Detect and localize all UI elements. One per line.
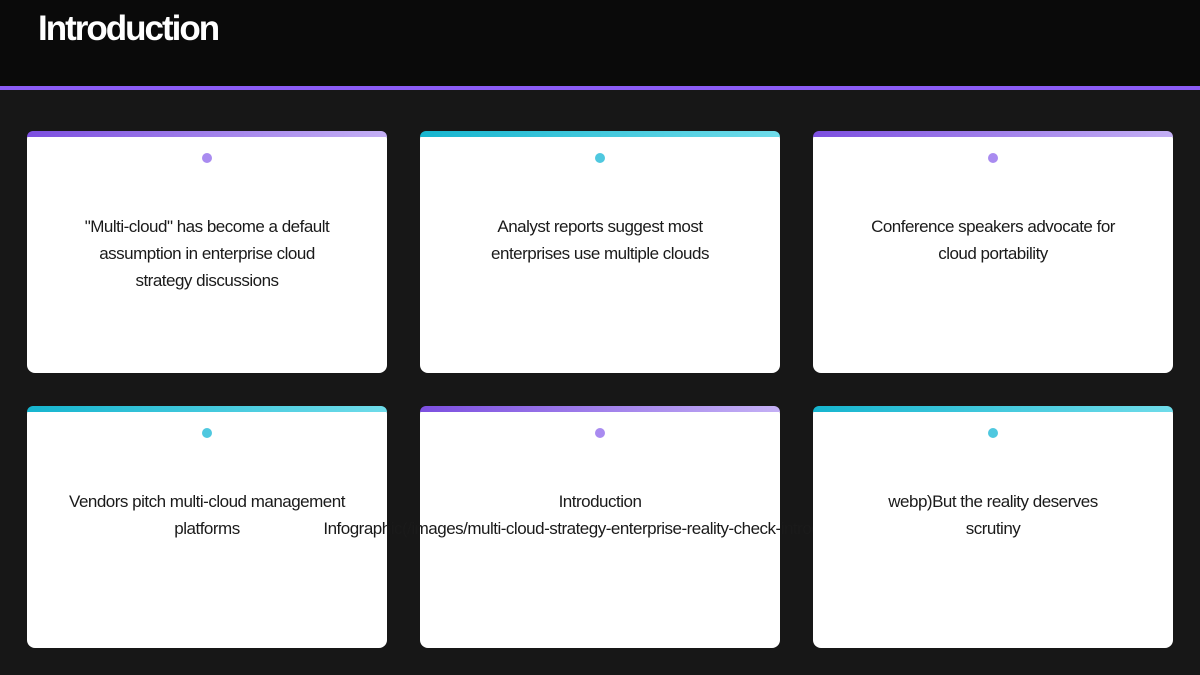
text <box>871 217 1116 263</box>
text: Infographic(/images/multi-cloud-strategy-enterprise-reality-check-introduction.webp) <box>323 519 911 538</box>
icon: dot <box>988 428 998 438</box>
text: Vendors pitch multi-cloud management <box>69 492 345 511</box>
title: Introduction <box>38 9 218 48</box>
text: enterprises use multiple clouds <box>491 244 709 263</box>
text: webp)But the reality deserves <box>888 492 1098 511</box>
card: conference speakers <box>813 131 1173 373</box>
text: Conference speakers advocate for <box>871 217 1115 236</box>
text <box>888 492 1098 538</box>
text: "Multi-cloud" has become a default <box>85 217 329 236</box>
text <box>491 217 709 263</box>
text: Introduction <box>559 492 641 511</box>
text: strategy discussions <box>135 271 279 290</box>
icon: dot <box>202 428 212 438</box>
text: scrutiny <box>966 519 1020 538</box>
text <box>323 492 911 538</box>
card: multi-cloud default <box>27 131 387 373</box>
icon: dot <box>595 428 605 438</box>
text <box>69 492 346 538</box>
icon: dot <box>202 153 212 163</box>
icon: dot <box>595 153 605 163</box>
header <box>0 0 1200 86</box>
text: assumption in enterprise cloud <box>99 244 315 263</box>
text <box>85 217 330 290</box>
text: cloud portability <box>938 244 1048 263</box>
card: vendors <box>27 406 387 648</box>
card: analyst reports <box>420 131 780 373</box>
card: introduction image <box>420 406 780 648</box>
text: Analyst reports suggest most <box>497 217 703 236</box>
icon: dot <box>988 153 998 163</box>
card: reality scrutiny <box>813 406 1173 648</box>
text: platforms <box>174 519 240 538</box>
